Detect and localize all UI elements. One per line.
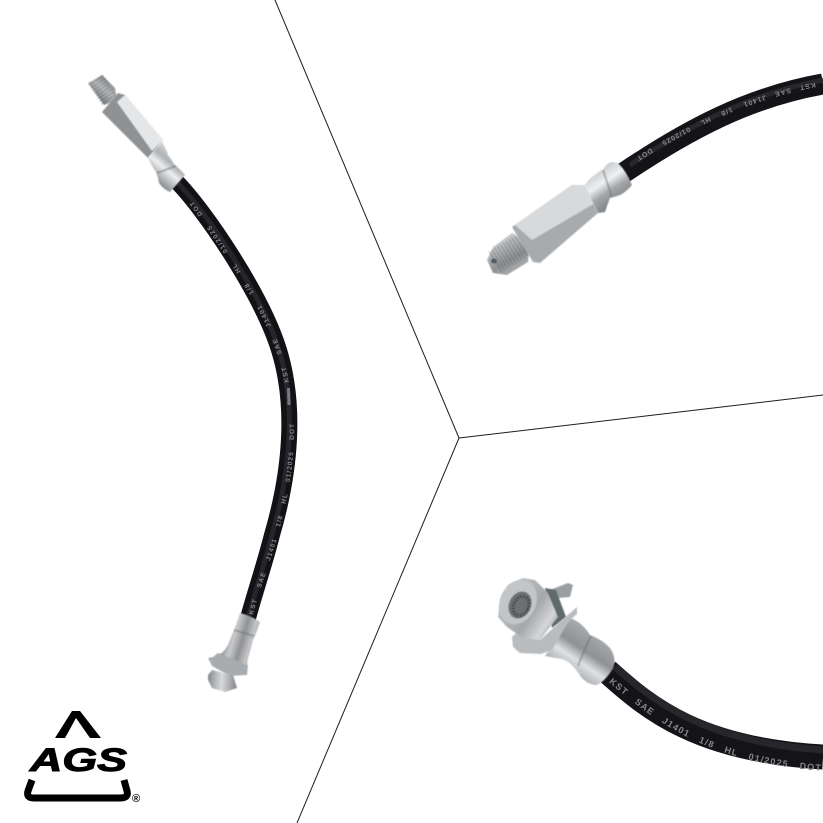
thread	[487, 233, 530, 275]
fitting body	[498, 578, 558, 640]
detail: threaded end of hose	[486, 74, 823, 276]
hose tube	[622, 80, 823, 174]
logo wordmark: AGS	[29, 742, 128, 778]
logo: AGS	[28, 711, 140, 805]
divider lines	[275, 0, 823, 823]
crimp collar	[585, 162, 632, 213]
hose markings	[190, 202, 294, 614]
logo top chevron	[55, 711, 101, 738]
hose: full view	[88, 74, 298, 692]
top fitting: hex nut	[102, 93, 163, 158]
registered mark: ®	[132, 793, 140, 805]
hose markings: KST SAE J1401 1/8 HL 01/2025 DOT	[190, 202, 289, 383]
gap behind nut	[545, 588, 566, 628]
hose tube	[607, 667, 823, 757]
hose tube	[176, 181, 289, 622]
hex nut	[512, 185, 598, 263]
crimp	[545, 618, 615, 685]
threaded opening	[492, 574, 544, 630]
top fitting: thread	[88, 75, 117, 105]
flange	[512, 607, 577, 654]
bottom fitting: crimp	[216, 613, 260, 665]
bottom fitting: end	[208, 670, 237, 692]
locking tab	[550, 583, 573, 598]
hose markings: KST SAE J1401 1/8 HL 01/2025 DOT	[638, 82, 816, 161]
hose markings: KST SAE J1401 1/8 HL 01/2025 DOT	[248, 424, 294, 614]
hose markings: KST SAE J1401 1/8 HL 01/2025 DOT	[609, 678, 821, 771]
bottom fitting: flange	[208, 653, 248, 676]
top fitting: crimp collar	[148, 142, 185, 192]
detail: banjo end of hose	[498, 578, 823, 771]
marking bar	[287, 388, 290, 405]
logo bottom bracket	[28, 780, 127, 798]
